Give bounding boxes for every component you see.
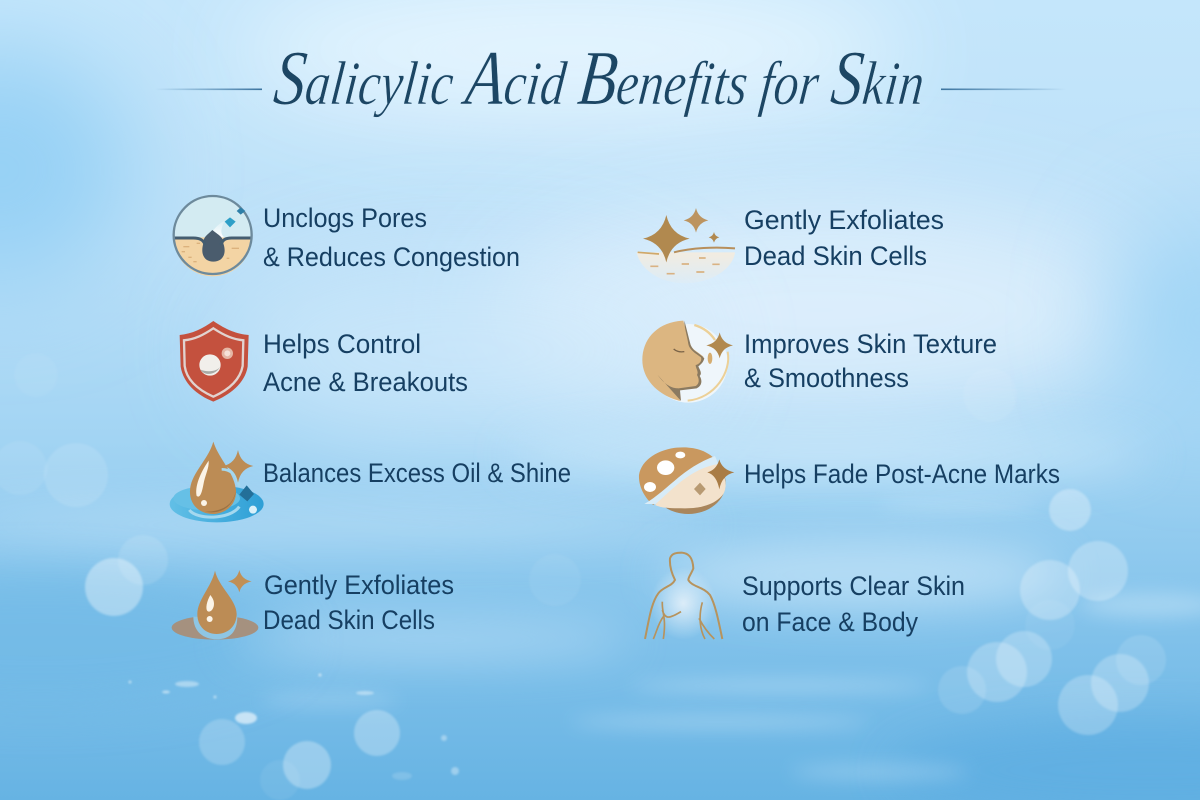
title rule: left	[155, 88, 262, 90]
icon: shield	[180, 321, 249, 402]
icon: face profile	[642, 321, 733, 403]
left column	[170, 196, 571, 640]
icon: body outline	[645, 553, 722, 640]
label: Unclogs Pores	[263, 203, 427, 233]
benefit: gently exfoliates	[172, 570, 454, 640]
label: Gently Exfoliates	[744, 205, 944, 235]
benefit: unclogs pores	[174, 196, 520, 276]
benefit: controls acne	[180, 321, 468, 402]
right column	[637, 205, 1060, 640]
benefit: improves texture	[642, 321, 997, 403]
benefit: balances oil	[170, 442, 571, 522]
label: Helps Fade Post-Acne Marks	[744, 459, 1060, 489]
benefit: gently exfoliates: Dead Skin Cells	[263, 605, 435, 635]
benefit: face and body	[645, 553, 965, 640]
benefit: controls acne: Acne & Breakouts	[263, 367, 468, 397]
icon: drop with sparkle	[172, 570, 258, 640]
benefit: improves texture: & Smoothness	[744, 363, 909, 393]
title text: Salicylic Acid Benefits for Skin	[270, 34, 929, 121]
icon: oil drop	[170, 442, 264, 522]
title rule: right	[941, 88, 1066, 90]
benefit: fades marks	[639, 447, 1060, 514]
label: Balances Excess Oil & Shine	[263, 458, 571, 488]
benefit: face and body: on Face & Body	[742, 607, 919, 637]
label: Helps Control	[263, 329, 421, 359]
icon: fading marks disc	[639, 447, 734, 514]
benefit: exfoliates dead skin: Dead Skin Cells	[744, 241, 927, 271]
benefit: exfoliates dead skin	[637, 205, 944, 283]
icon: sparkling skin	[637, 208, 735, 283]
label: Gently Exfoliates	[264, 570, 454, 600]
label: Improves Skin Texture	[744, 329, 997, 359]
bokeh lights	[0, 353, 1166, 800]
icon: clogged pore	[174, 196, 252, 276]
benefit: unclogs pores: & Reduces Congestion	[263, 242, 520, 272]
label: Supports Clear Skin	[742, 571, 965, 601]
